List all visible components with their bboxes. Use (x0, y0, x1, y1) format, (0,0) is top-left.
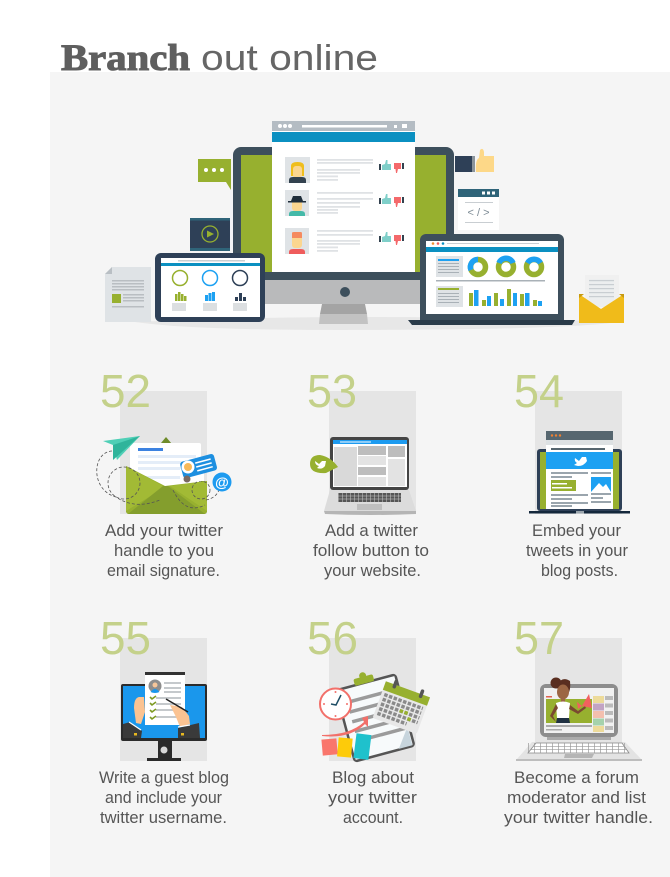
icon: envelope with paper plane: @ (215, 474, 229, 490)
caption: blog posts. (541, 561, 618, 580)
text lines (317, 159, 373, 252)
number: 52 (100, 365, 151, 417)
caption (99, 768, 229, 827)
code window (458, 189, 499, 230)
gray backdrop (120, 391, 207, 514)
caption: twitter username. (100, 808, 227, 827)
gray backdrop (329, 391, 416, 514)
number: 53 (307, 365, 357, 417)
gray backdrop (535, 391, 622, 514)
yellow envelope (579, 275, 624, 323)
icon: laptop with moderator (516, 678, 642, 761)
caption: and include your (105, 788, 222, 807)
caption: tweets in your (526, 541, 628, 560)
caption: Add your twitter (105, 521, 223, 540)
caption (313, 521, 429, 580)
caption: Embed your (532, 521, 621, 540)
bar chart (469, 289, 542, 306)
caption (105, 521, 223, 580)
code window: < / > (467, 207, 490, 219)
video player (190, 218, 230, 251)
caption: Become a forum (514, 768, 639, 787)
caption: Blog about (332, 768, 414, 787)
number: 55 (100, 612, 151, 664)
avatar: man with hat (285, 190, 309, 216)
number: 57 (514, 612, 564, 664)
number: 54 (514, 365, 564, 417)
caption (526, 521, 628, 580)
thumbs up hand (455, 149, 494, 172)
caption (328, 768, 417, 827)
caption: Write a guest blog (99, 768, 229, 787)
tip 56 (307, 612, 432, 827)
tip 53 (307, 365, 429, 580)
title: Branch (61, 38, 190, 79)
laptop with charts (408, 234, 575, 325)
icon: envelope with paper plane (97, 436, 232, 514)
number: 56 (307, 612, 358, 664)
gray backdrop (329, 638, 416, 761)
gray backdrop (535, 638, 622, 761)
chat bubble (198, 159, 231, 190)
caption: handle to you (114, 541, 214, 560)
tablet with rings (155, 253, 265, 322)
avatar: red hair man (285, 228, 309, 254)
caption: Add a twitter (325, 521, 418, 540)
like and dislike icons (379, 160, 404, 245)
desktop monitor (233, 147, 454, 324)
tip 55 (99, 612, 229, 827)
icon: laptop with twitter follow (310, 437, 416, 515)
icon: monitor with guest blog post (121, 672, 207, 761)
caption: moderator and list (507, 788, 646, 807)
hero illustration: devices (105, 121, 624, 330)
tip 57 (504, 612, 653, 827)
donut charts (470, 258, 542, 274)
table cards (436, 256, 463, 307)
title (61, 37, 378, 79)
title: out online (201, 37, 378, 78)
tip 54 (514, 365, 630, 580)
gray backdrop (120, 638, 207, 761)
caption: email signature. (107, 561, 220, 580)
caption: your twitter (328, 788, 417, 807)
document (105, 267, 151, 322)
caption: your twitter handle. (504, 808, 653, 827)
tip 52 (97, 365, 232, 580)
avatar: woman (285, 157, 310, 183)
icon: clipboard, clock and calendar (320, 664, 432, 763)
icon: laptop with embedded tweet (529, 431, 630, 514)
ground shadow (135, 317, 620, 330)
caption: your website. (324, 561, 421, 580)
browser window with comments (272, 121, 415, 272)
caption: follow button to (313, 541, 429, 560)
caption (504, 768, 653, 827)
caption: account. (343, 808, 403, 827)
